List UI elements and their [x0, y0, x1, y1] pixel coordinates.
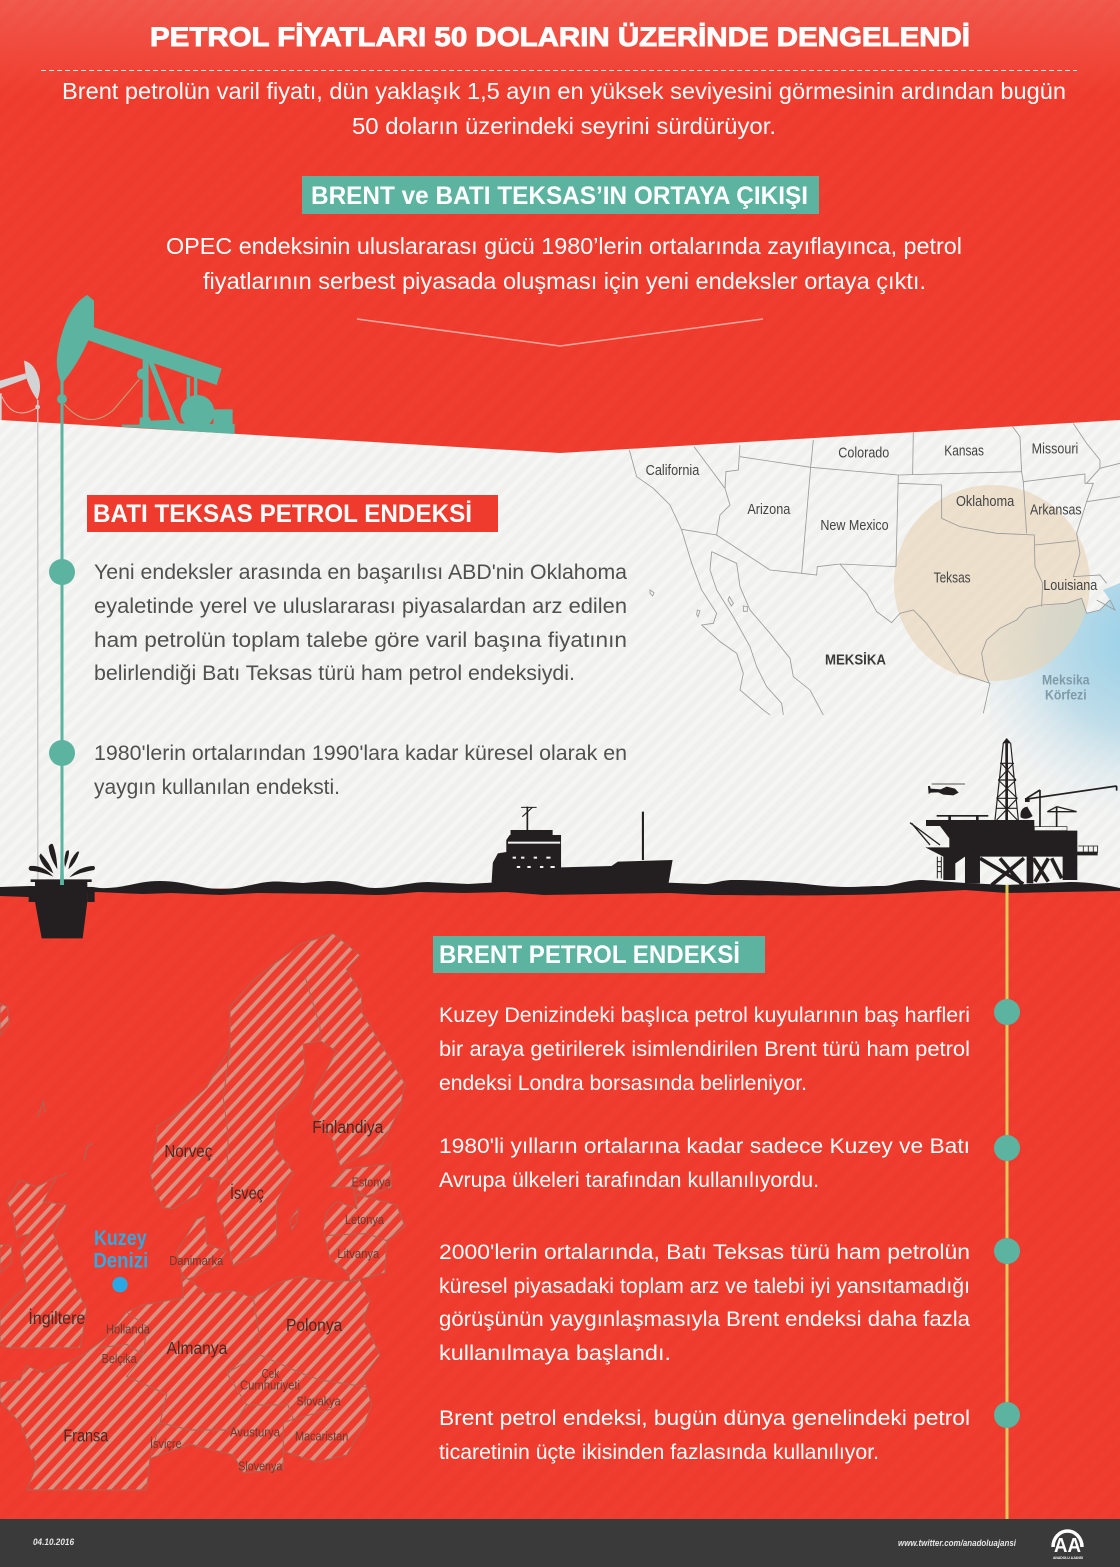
callout: Kuzey Denizi	[93, 1226, 148, 1292]
text: Brent paragraph 2	[439, 1135, 970, 1192]
footer date: 04.10.2016	[33, 1537, 75, 1547]
map labels: Europe: Letonya	[345, 1211, 385, 1227]
map labels: Europe: Polonya	[286, 1314, 343, 1335]
yellow timeline: Brent	[994, 885, 1020, 1519]
map labels: United States and Mexico	[646, 442, 1098, 702]
map labels: United States and Mexico: MEKSİKA	[825, 651, 886, 668]
logo: Anadolu Ajansı: AA	[1054, 1535, 1081, 1557]
panel: light Texas band	[0, 420, 1120, 900]
map labels: United States and Mexico: New Mexico	[820, 518, 889, 534]
chevron divider	[357, 319, 763, 346]
intro text: Brent petrolün varil fiyatı, dün yaklaşık 1,5 ayın en yüksek seviyesini görmesinin ardından bugün	[62, 78, 1066, 104]
lower red panel	[0, 888, 1120, 1520]
footer bar	[0, 1519, 1120, 1567]
map labels: Europe: Cumhuriyeti	[240, 1377, 300, 1393]
text: Brent paragraph 2: Avrupa ülkeleri tarafından kullanılıyordu.	[439, 1169, 819, 1192]
small grey pumpjack	[0, 361, 40, 420]
dashed title rule	[41, 70, 1077, 72]
map labels: Europe	[28, 1116, 391, 1474]
map labels: Europe: Almanya	[167, 1337, 228, 1358]
countries	[0, 934, 405, 1490]
text: Brent paragraph 3	[439, 1241, 970, 1365]
heading: Batı Teksas Petrol Endeksi: BATI TEKSAS PETROL ENDEKSİ	[93, 500, 472, 528]
map labels: United States and Mexico: Missouri	[1032, 442, 1078, 458]
small islands	[37, 1101, 93, 1176]
text: Brent paragraph 1	[439, 1004, 970, 1095]
map labels: Europe: Norveç	[164, 1140, 213, 1161]
text: Brent paragraph 4: ticaretinin üçte ikisinden fazlasında kullanılıyor.	[439, 1441, 879, 1464]
map labels: Europe: Avusturya	[230, 1424, 281, 1439]
heading: Brent ve Batı Teksas: BRENT ve BATI TEKSAS’IN ORTAYA ÇIKIŞI	[311, 182, 808, 210]
text: Brent paragraph 3: görüşünün yaygınlaşmasıyla Brent endeksi daha fazla	[439, 1308, 970, 1331]
state borders	[629, 423, 1120, 715]
text: Batı Teksas paragraph 2: yaygın kullanılan endeksti.	[94, 776, 340, 799]
map labels: United States and Mexico: Louisiana	[1043, 578, 1098, 594]
map labels: Europe: İsveç	[230, 1182, 264, 1203]
text: Brent paragraph 1: Kuzey Denizindeki başlıca petrol kuyularının baş harfleri	[439, 1004, 970, 1027]
map labels: United States and Mexico: Körfezi	[1045, 686, 1087, 702]
map labels: Europe: Danimarka	[169, 1253, 224, 1268]
OPEC text: OPEC endeksinin uluslararası gücü 1980’lerin ortalarında zayıflayınca, petrol	[166, 233, 962, 259]
text: Batı Teksas paragraph 1: belirlendiği Batı Teksas türü ham petrol endeksiydi.	[94, 662, 575, 685]
OPEC text	[166, 233, 962, 294]
map labels: Europe: Estonya	[352, 1174, 391, 1189]
text: Batı Teksas paragraph 1	[94, 561, 627, 685]
map: Europe	[0, 934, 405, 1490]
intro text: 50 doların üzerindeki seyrini sürdürüyor.	[352, 113, 776, 139]
icon: oil well tank	[29, 844, 95, 938]
map labels: United States and Mexico: Arizona	[747, 502, 791, 518]
map labels: Europe: Macaristan	[295, 1428, 348, 1444]
teal pipe into tank	[60, 860, 64, 885]
map labels: United States and Mexico: Oklahoma	[956, 494, 1015, 510]
Texas highlight circle	[894, 485, 1090, 681]
teal pumpjack	[57, 295, 235, 434]
title: PETROL FİYATLARI 50 DOLARIN ÜZERİNDE DENGELENDİ	[150, 22, 970, 52]
map labels: Europe: Slovenya	[238, 1458, 283, 1474]
map labels: Europe: Belçika	[102, 1350, 137, 1366]
footer url: www.twitter.com/anadoluajansi	[898, 1538, 1016, 1548]
callout: Kuzey Denizi: Denizi	[93, 1249, 148, 1273]
text: Brent paragraph 2: 1980'li yılların ortalarına kadar sadece Kuzey ve Batı	[439, 1135, 970, 1158]
map labels: United States and Mexico: California	[646, 463, 700, 479]
icon: helicopter	[928, 784, 965, 795]
map labels: Europe: İsviçre	[150, 1435, 182, 1451]
map labels: United States and Mexico: Meksika	[1042, 671, 1090, 687]
logo: Anadolu Ajansı: ANADOLU AJANSI	[1053, 1555, 1083, 1560]
map labels: Europe: Hollanda	[106, 1321, 151, 1337]
text: Brent paragraph 3: küresel piyasadaki toplam arz ve talebi iyi yansıtamadığı	[439, 1275, 970, 1298]
map labels: Europe: Çek	[262, 1366, 280, 1381]
text: Batı Teksas paragraph 1: eyaletinde yerel ve uluslararası piyasalardan arz edilen	[94, 595, 627, 618]
text: Batı Teksas paragraph 1: ham petrolün toplam talebe göre varil başına fiyatının	[94, 629, 627, 652]
text: Brent paragraph 4: Brent petrol endeksi, bugün dünya genelindeki petrol	[439, 1407, 970, 1430]
map labels: United States and Mexico: Kansas	[944, 443, 984, 459]
text: Brent paragraph 4	[439, 1407, 970, 1464]
teal timeline: Batı Teksas	[49, 380, 75, 870]
map labels: Europe: İngiltere	[28, 1307, 85, 1328]
text: Brent paragraph 1: bir araya getirilerek isimlendirilen Brent türü ham petrol	[439, 1038, 970, 1061]
text: Batı Teksas paragraph 2	[94, 742, 627, 799]
callout: Kuzey Denizi: Kuzey	[94, 1226, 147, 1250]
map labels: United States and Mexico: Teksas	[934, 570, 971, 586]
gulf shading	[982, 583, 1120, 830]
map labels: Europe: Fransa	[63, 1425, 109, 1446]
OPEC text: fiyatlarının serbest piyasada oluşması için yeni endeksler ortaya çıktı.	[203, 268, 926, 294]
intro text	[62, 78, 1066, 139]
grey well line	[37, 400, 38, 882]
map labels: United States and Mexico: Colorado	[838, 446, 889, 462]
text: Batı Teksas paragraph 2: 1980'lerin ortalarından 1990'lara kadar küresel olarak en	[94, 742, 627, 765]
map labels: Europe: Slovakya	[297, 1393, 341, 1408]
text: Batı Teksas paragraph 1: Yeni endeksler arasında en başarılısı ABD'nin Oklahoma	[94, 561, 627, 584]
icon: tanker ship	[492, 807, 673, 884]
map labels: Europe: Finlandiya	[312, 1116, 384, 1137]
text: Brent paragraph 3: 2000'lerin ortalarında, Batı Teksas türü ham petrolün	[439, 1241, 970, 1264]
text: Brent paragraph 3: kullanılmaya başlandı.	[439, 1342, 671, 1365]
map labels: Europe: Litvanya	[337, 1245, 380, 1261]
map labels: United States and Mexico: Arkansas	[1030, 503, 1082, 519]
heading: Brent Petrol Endeksi: BRENT PETROL ENDEKSİ	[439, 941, 740, 969]
oil wave	[0, 880, 1120, 897]
internal borders	[100, 976, 387, 1459]
icon: offshore platform	[910, 738, 1117, 885]
text: Brent paragraph 1: endeksi Londra borsasında belirleniyor.	[439, 1072, 807, 1095]
